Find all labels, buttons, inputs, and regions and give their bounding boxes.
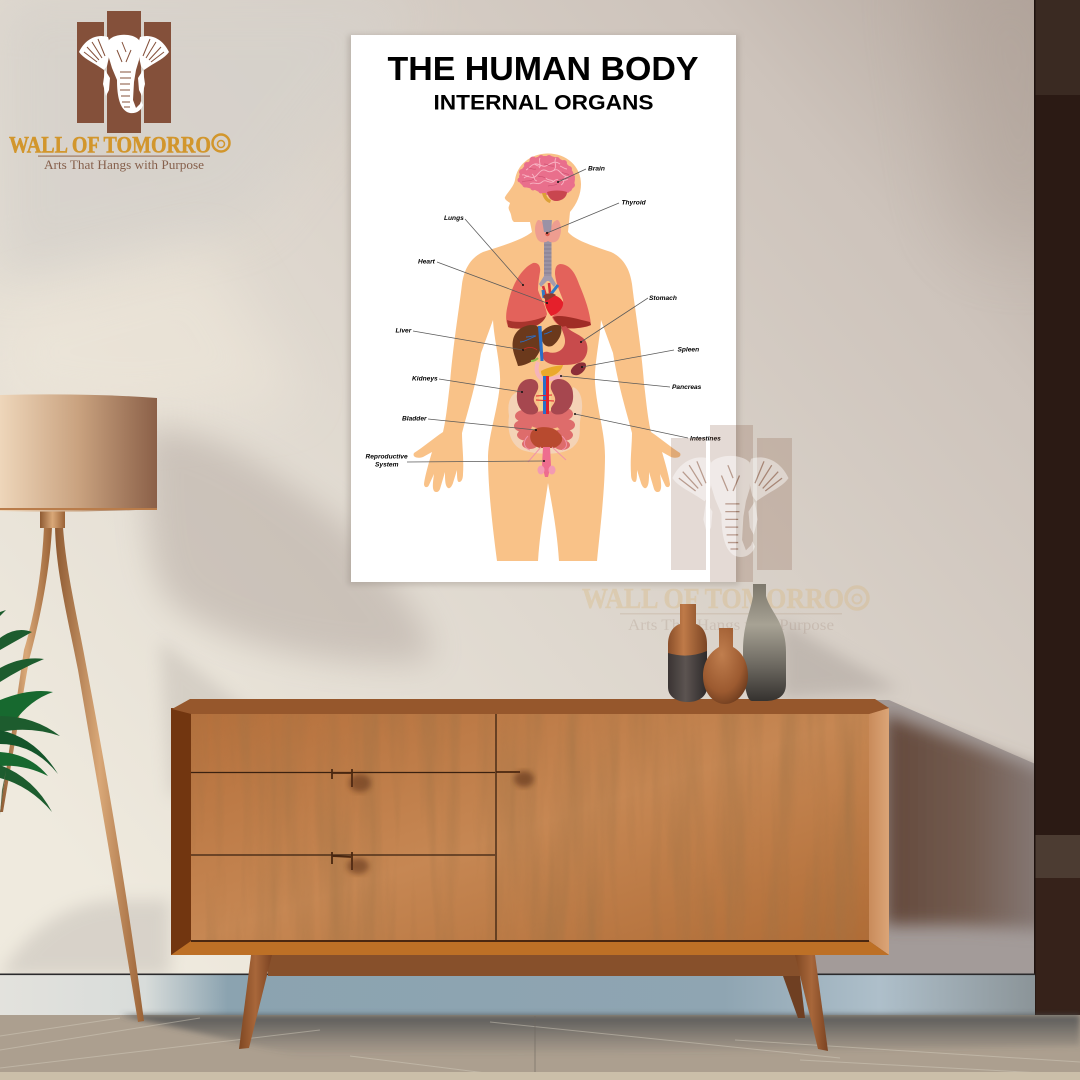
- drawer handle lower: [332, 852, 369, 874]
- floor lamp: [0, 394, 157, 1022]
- leader dots: [521, 181, 583, 462]
- heart: [543, 283, 563, 316]
- organ labels: Lungs: [444, 215, 464, 222]
- organ labels: System: [375, 462, 399, 468]
- lungs: [506, 263, 591, 329]
- vase: tall grey: [743, 584, 786, 701]
- poster title: THE HUMAN BODY: [388, 50, 698, 87]
- kidneys: [517, 376, 573, 415]
- top surface: [172, 699, 889, 714]
- back right leg: [783, 976, 805, 1018]
- reproductive system: [524, 436, 566, 477]
- floor: [0, 1015, 1080, 1080]
- thyroid: [535, 220, 561, 242]
- liver: [513, 325, 561, 366]
- large intestine: [508, 387, 582, 454]
- dark side column: [1034, 0, 1080, 1015]
- organ labels: Intestines: [690, 436, 721, 442]
- left inner side: [171, 709, 191, 955]
- bottom rail: [171, 941, 889, 955]
- top logo: Arts That Hangs with Purpose: [44, 157, 204, 172]
- front left leg: [239, 955, 272, 1049]
- organ labels: Spleen: [678, 346, 699, 354]
- small intestine: [514, 408, 575, 450]
- vase: two-tone: [668, 604, 707, 702]
- duodenum: [537, 362, 562, 380]
- sideboard: [171, 699, 889, 1051]
- organ labels: Stomach: [649, 295, 677, 302]
- organ labels: Kidneys: [412, 376, 438, 382]
- poster subtitle: INTERNAL ORGANS: [434, 92, 654, 114]
- plant leaves: [0, 610, 60, 815]
- organ labels: Thyroid: [622, 200, 647, 206]
- baseboard: [0, 974, 1035, 1016]
- leader lines: [407, 169, 688, 462]
- stomach: [542, 326, 587, 365]
- organ labels: [366, 166, 721, 468]
- body silhouette: [414, 153, 680, 561]
- watermark logo: Arts That Hangs with Purpose: [628, 617, 834, 634]
- front panels: [191, 714, 869, 941]
- top logo: [9, 11, 230, 172]
- poster: [348, 35, 739, 585]
- right side: [869, 708, 889, 955]
- organ labels: Liver: [396, 328, 412, 334]
- vase: copper round: [703, 628, 748, 704]
- organs: [506, 155, 591, 477]
- watermark logo: WALL OF TOMORRO: [582, 583, 844, 615]
- organ labels: Pancreas: [672, 384, 702, 391]
- vases: [668, 584, 786, 704]
- pancreas: [541, 365, 563, 377]
- spleen: [571, 362, 586, 375]
- brain: [518, 155, 575, 203]
- organ labels: Bladder: [402, 416, 427, 422]
- drawer handle upper: [332, 769, 371, 792]
- cerebellum: [547, 190, 567, 201]
- front right leg: [795, 955, 828, 1051]
- bladder and uterus: [530, 427, 562, 448]
- top logo: WALL OF TOMORRO: [9, 132, 211, 158]
- organ labels: Reproductive: [366, 454, 408, 460]
- brain stem: [542, 193, 551, 203]
- cabinet body: [171, 708, 889, 955]
- watermark logo: [582, 425, 868, 634]
- trachea: [539, 240, 556, 287]
- organ labels: Heart: [418, 258, 436, 266]
- organ labels: Brain: [588, 166, 605, 172]
- door handle: [496, 771, 534, 787]
